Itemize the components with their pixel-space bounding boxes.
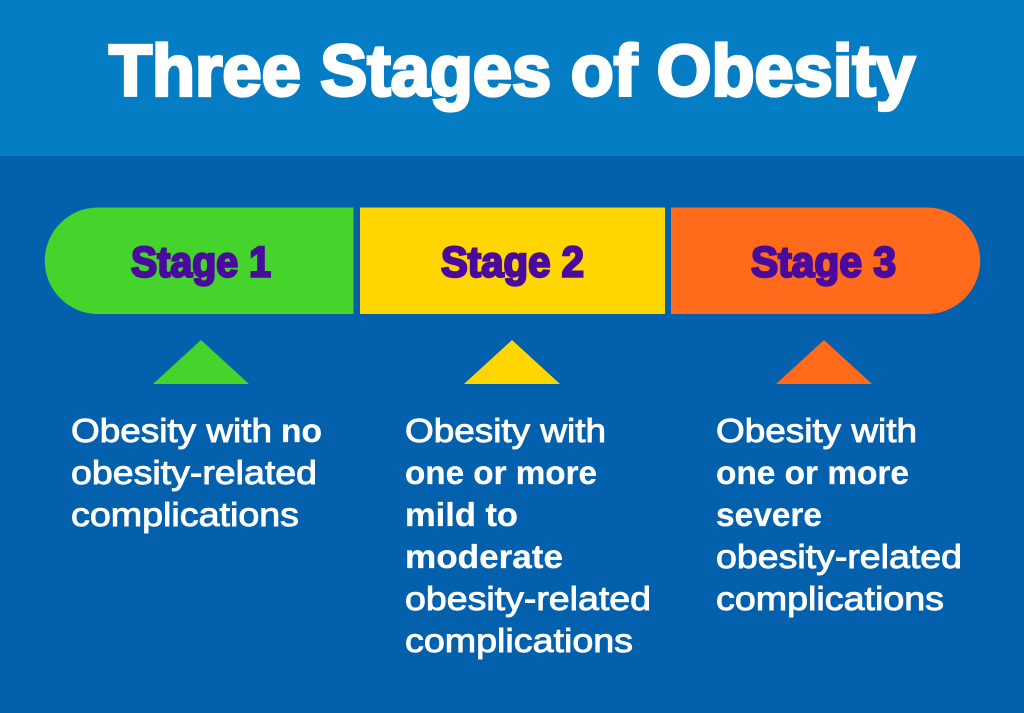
text block: stage 2 description: one or more — [405, 454, 597, 491]
panel: stage 3 bar — [671, 208, 980, 314]
stage 2 label: Stage 2 — [441, 238, 584, 286]
icon: orange triangle — [776, 340, 872, 384]
stage 1 label: Stage 1 — [131, 238, 271, 286]
panel: stage 2 bar — [360, 208, 665, 314]
header band — [0, 0, 1024, 156]
text block: stage 3 description: complications — [716, 580, 944, 617]
text block: stage 3 description: one or more — [716, 454, 909, 491]
text block: stage 1 description: Obesity with — [71, 412, 272, 449]
text block: stage 2 description: mild to — [405, 496, 518, 533]
stage 3 label: Stage 3 — [751, 238, 896, 286]
text block: stage 1 description: no — [281, 412, 322, 449]
text block: stage 1 description: obesity-related — [71, 454, 317, 491]
text block: stage 1 description: complications — [71, 496, 299, 533]
text block: stage 2 description — [405, 412, 651, 659]
text block: stage 2 description: Obesity with — [405, 412, 606, 449]
text block: stage 3 description: obesity-related — [716, 538, 962, 575]
text block: stage 3 description: Obesity with — [716, 412, 917, 449]
icon: green triangle — [153, 340, 249, 384]
icon: yellow triangle — [464, 340, 560, 384]
text block: stage 2 description: complications — [405, 622, 633, 659]
text block: stage 2 description: obesity-related — [405, 580, 651, 617]
text block: stage 3 description — [716, 412, 962, 617]
text block: stage 3 description: severe — [716, 496, 822, 533]
panel: stage 1 bar — [45, 208, 354, 314]
title: Three Stages of Obesity — [109, 32, 915, 112]
text block: stage 1 description — [71, 412, 322, 533]
text block: stage 2 description: moderate — [405, 538, 563, 575]
